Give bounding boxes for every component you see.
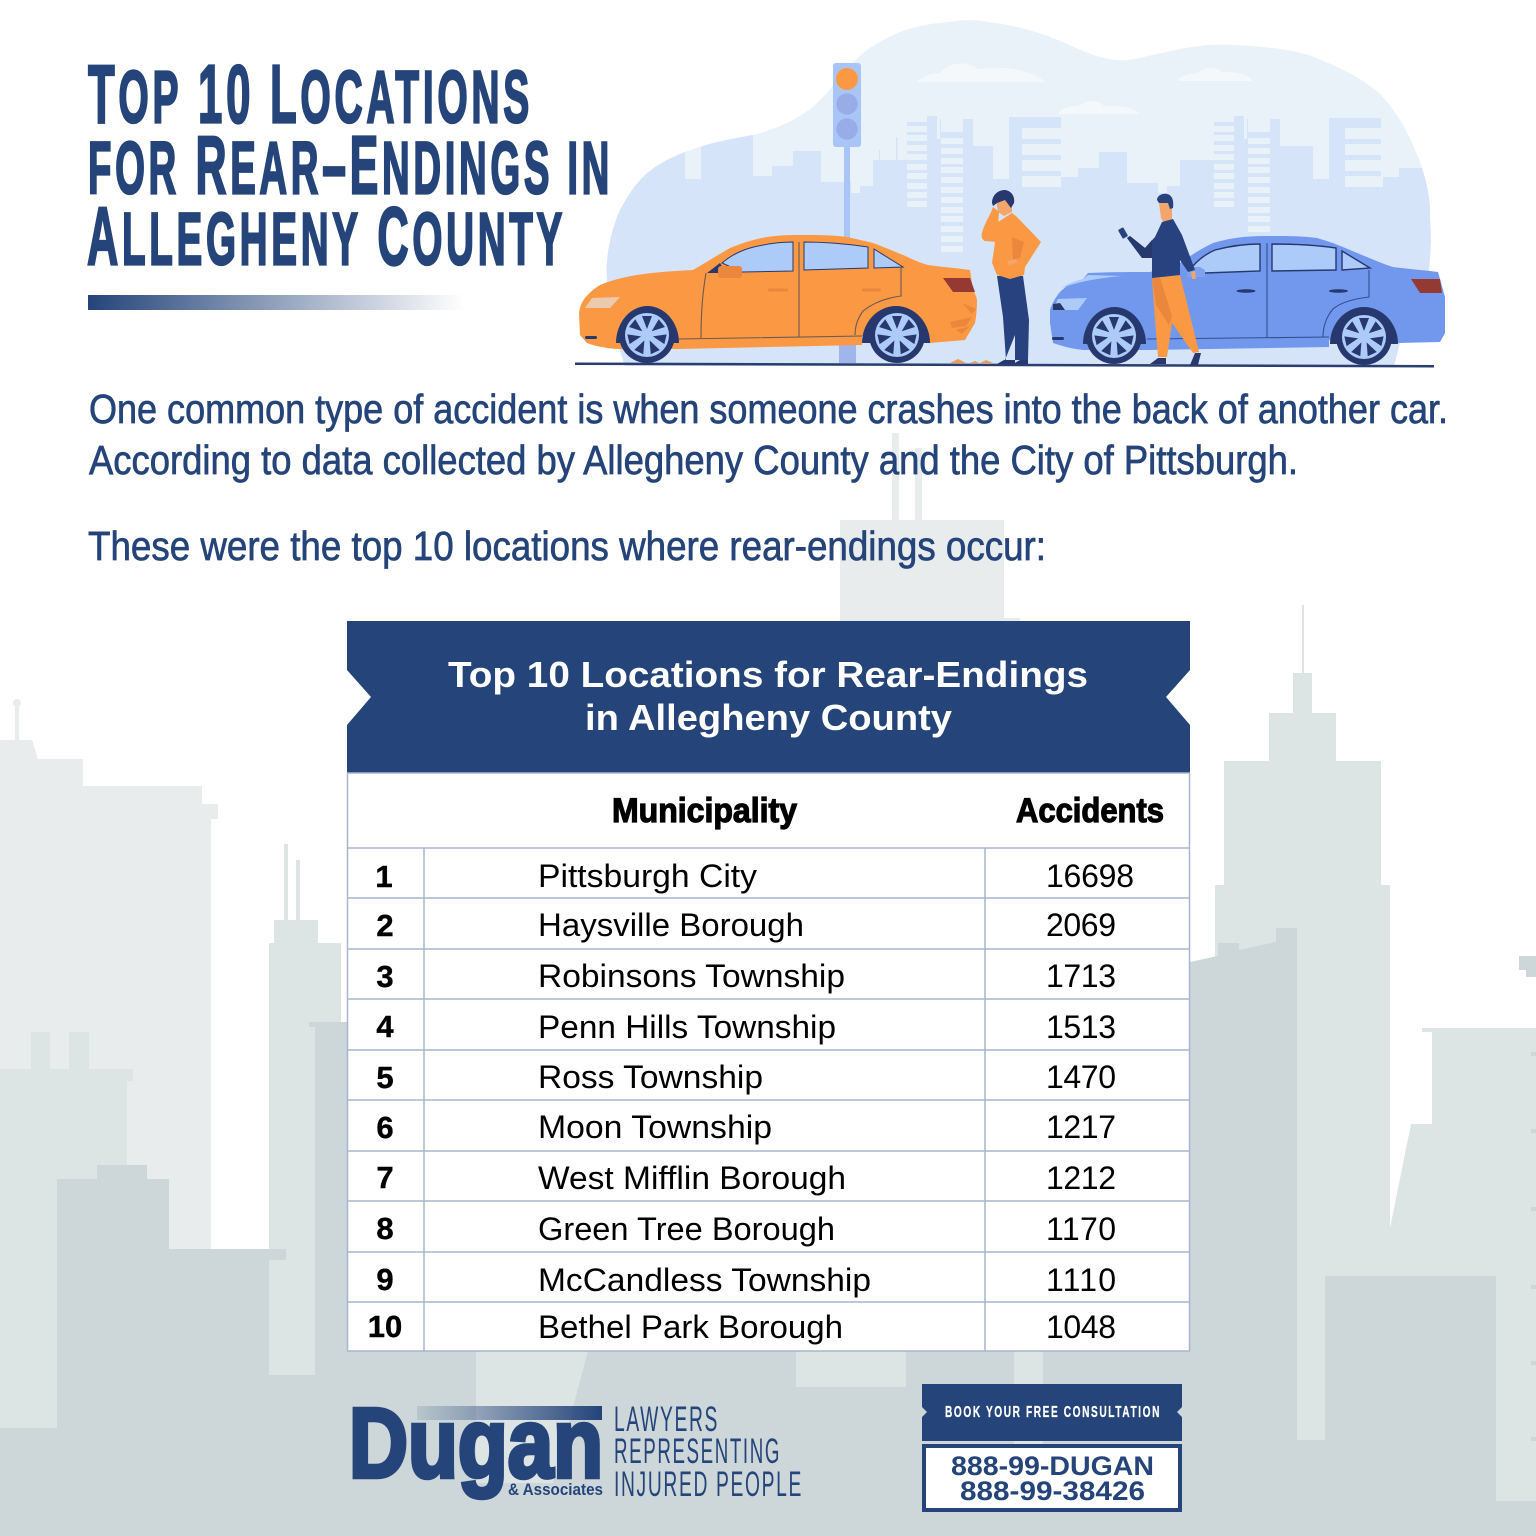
table rows: 1048 (1046, 1309, 1116, 1345)
clouds (917, 63, 1253, 114)
logo: Dugan & Associates: & Associates (508, 1480, 603, 1499)
logo: Dugan & Associates: Dugan (349, 1388, 603, 1498)
table grid (347, 773, 1190, 1351)
title: ALLEGHENY COUNTY (87, 190, 566, 282)
intro text (88, 386, 1448, 569)
table rows: 10 (368, 1309, 402, 1344)
table rows: 1470 (1046, 1059, 1116, 1095)
logo: Dugan & Associates (349, 1388, 803, 1504)
table rows (368, 858, 1134, 1345)
table rows: 1110 (1046, 1262, 1116, 1298)
person: man with hand on head (982, 190, 1041, 364)
table rows: McCandless Township (538, 1262, 871, 1298)
background skyline (0, 433, 1536, 1536)
table rows: 1513 (1046, 1009, 1116, 1045)
table rows: 7 (376, 1160, 394, 1195)
table rows: Robinsons Township (538, 958, 845, 994)
title: TOP 10 LOCATIONS (88, 48, 533, 140)
orange car (579, 235, 977, 363)
table rows: 2 (376, 908, 394, 943)
intro text: These were the top 10 locations where rear-endings occur: (88, 523, 1046, 569)
table rows: Moon Township (538, 1109, 772, 1145)
table rows: 1713 (1046, 958, 1116, 994)
table rows: Bethel Park Borough (538, 1309, 843, 1345)
table column headers: Accidents (1016, 792, 1164, 830)
table banner: in Allegheny County (585, 697, 952, 738)
table rows: 6 (376, 1110, 394, 1145)
consultation banner (922, 1384, 1182, 1441)
phone box: 888-99-38426 (960, 1476, 1145, 1506)
city blob backdrop (600, 15, 1440, 370)
illustration: crash scene (575, 15, 1445, 370)
title: FOR REAR–ENDINGS IN (88, 118, 613, 212)
table column headers: Municipality (612, 792, 797, 830)
table rows: Haysville Borough (538, 907, 804, 943)
table panel (347, 621, 1190, 1351)
title (87, 48, 613, 282)
table rows: 1 (375, 859, 393, 894)
table rows: 3 (376, 959, 394, 994)
table rows: 16698 (1046, 858, 1134, 894)
debris (950, 359, 993, 363)
ground line (575, 362, 1434, 368)
table rows: West Mifflin Borough (538, 1160, 846, 1196)
title underline (88, 295, 464, 310)
person: man with phone (1118, 194, 1201, 365)
traffic light (833, 63, 861, 363)
logo tagline: REPRESENTING (614, 1432, 781, 1471)
table banner (347, 621, 1190, 773)
table banner: Top 10 Locations for Rear-Endings (448, 654, 1088, 695)
table rows: 1170 (1046, 1211, 1116, 1247)
logo tagline (614, 1400, 803, 1504)
light buildings (0, 433, 1020, 1260)
table rows: Ross Township (538, 1059, 763, 1095)
table rows: 9 (376, 1262, 394, 1297)
logo tagline: LAWYERS (614, 1400, 719, 1439)
table rows: 1217 (1046, 1109, 1116, 1145)
table rows: Green Tree Borough (538, 1211, 835, 1247)
table rows: 2069 (1046, 907, 1116, 943)
dark foreground buildings (0, 928, 1536, 1536)
consultation banner: BOOK YOUR FREE CONSULTATION (945, 1404, 1161, 1421)
intro text: According to data collected by Allegheny County and the City of Pittsburgh. (89, 437, 1298, 483)
table rows: 4 (376, 1009, 394, 1044)
table rows: 5 (376, 1060, 394, 1095)
table rows: 1212 (1046, 1160, 1116, 1196)
table rows: Penn Hills Township (538, 1009, 836, 1045)
call to action (922, 1384, 1182, 1510)
table column headers (612, 792, 1164, 830)
mid buildings (0, 605, 1536, 1510)
blue car (1050, 236, 1445, 365)
phone box: 888-99-DUGAN (951, 1451, 1154, 1481)
logo tagline: INJURED PEOPLE (614, 1465, 803, 1504)
table rows: Pittsburgh City (538, 858, 757, 894)
table rows: 8 (376, 1211, 394, 1246)
phone box (924, 1446, 1180, 1510)
